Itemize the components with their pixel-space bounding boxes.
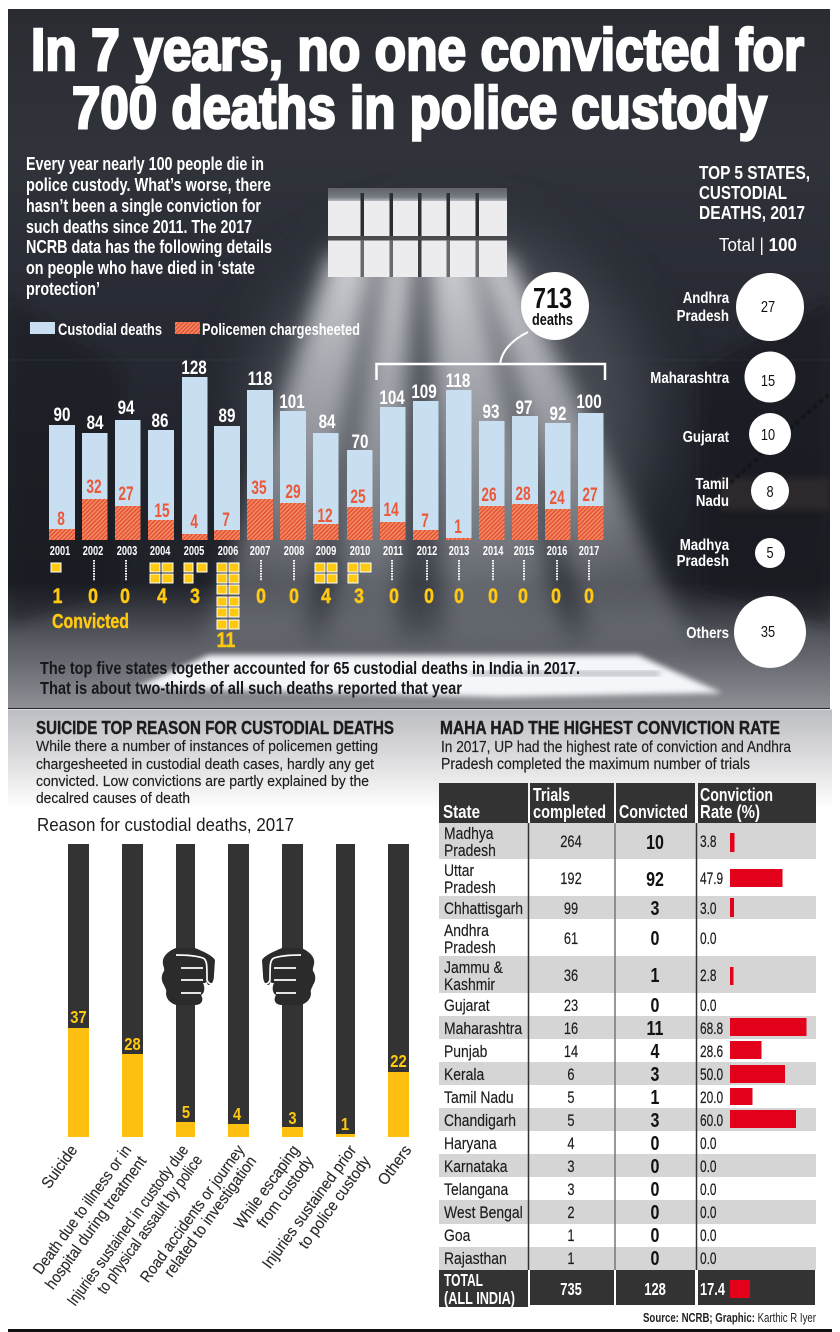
conviction rates: 0.0 bbox=[700, 1204, 717, 1223]
convicted counts: 0 bbox=[651, 1132, 659, 1154]
conviction rates: 0.0 bbox=[700, 930, 717, 949]
year labels bbox=[50, 545, 599, 558]
pictogram: convictions per year: 4 bbox=[157, 584, 167, 608]
bar chart: reasons as prison bars: 5 bbox=[182, 1103, 190, 1122]
total row: (ALL INDIA) bbox=[444, 1288, 515, 1308]
year labels: 2007 bbox=[250, 545, 270, 558]
chargesheeted values: 28 bbox=[515, 483, 531, 505]
total row bbox=[439, 1270, 815, 1308]
chargesheeted values: 7 bbox=[222, 509, 230, 531]
trials completed: 1 bbox=[567, 1228, 575, 1245]
state names bbox=[444, 825, 523, 1268]
table header: State bbox=[443, 802, 480, 822]
state names: Tamil Nadu bbox=[444, 1089, 514, 1107]
convicted counts: 0 bbox=[651, 1155, 659, 1177]
state names: Kashmir bbox=[444, 976, 495, 994]
chargesheeted values: 27 bbox=[582, 484, 598, 506]
legend bbox=[30, 320, 360, 339]
chargesheeted values: 25 bbox=[350, 486, 366, 508]
trials completed: 61 bbox=[564, 931, 578, 948]
icon: right hand gripping bar bbox=[262, 948, 315, 1005]
state names: Madhya bbox=[444, 825, 494, 843]
conviction rates: 0.0 bbox=[700, 1227, 717, 1246]
chargesheeted values: 8 bbox=[57, 508, 65, 530]
pictogram: convictions per year: 0 bbox=[518, 584, 528, 608]
bubble chart: top 5 states: Others bbox=[686, 625, 729, 642]
text block: suicide explanation bbox=[36, 738, 378, 807]
trials completed: 5 bbox=[567, 1113, 575, 1130]
conviction rates: 0.0 bbox=[700, 1158, 717, 1177]
heading: reason chart: Reason for custodial deaths, 2017 bbox=[37, 814, 294, 835]
chargesheeted values: 32 bbox=[86, 476, 102, 498]
conviction rates: 47.9 bbox=[700, 870, 723, 889]
chargesheeted values: 29 bbox=[285, 481, 301, 503]
table header bbox=[439, 783, 816, 823]
chargesheeted values: 14 bbox=[384, 499, 399, 521]
state names: Chhattisgarh bbox=[444, 900, 523, 918]
convicted counts: 3 bbox=[651, 1109, 659, 1131]
rate bars bbox=[730, 833, 806, 1128]
text block: intro: on people who have died in ‘state bbox=[26, 258, 255, 278]
table header: Trials bbox=[533, 785, 570, 805]
text block: intro: police custody. What’s worse, there bbox=[26, 175, 271, 195]
pictogram: convictions per year: Convicted bbox=[52, 611, 129, 633]
bar chart: reasons as prison bars: 3 bbox=[288, 1109, 297, 1128]
state names: Pradesh bbox=[444, 879, 496, 897]
conviction rates: 28.6 bbox=[700, 1043, 723, 1062]
conviction rates: 20.0 bbox=[700, 1089, 723, 1108]
total death values: 84 bbox=[87, 411, 104, 433]
text block: intro: Every year nearly 100 people die in bbox=[26, 154, 264, 174]
callout: 713 deaths bracket bbox=[376, 272, 605, 380]
chargesheeted values: 12 bbox=[317, 505, 333, 527]
total death values: 128 bbox=[181, 356, 207, 378]
heading: suicide top reason: SUICIDE TOP REASON FOR CUSTODIAL DEATHS bbox=[36, 718, 394, 738]
pictogram: convictions per year: 0 bbox=[389, 584, 399, 608]
legend: Policemen chargesheeted bbox=[202, 320, 360, 339]
rotated reason labels: from custody bbox=[254, 1153, 317, 1231]
bar chart: reasons as prison bars: 4 bbox=[233, 1105, 242, 1124]
chargesheeted values: 27 bbox=[118, 483, 134, 505]
convicted counts: 4 bbox=[651, 1040, 659, 1062]
rotated reason labels bbox=[30, 1142, 415, 1309]
chargesheeted values: 4 bbox=[190, 511, 199, 533]
text block: conviction summary: Pradesh completed the maximum number of trials bbox=[441, 756, 750, 773]
bubble chart: top 5 states: 10 bbox=[761, 427, 775, 444]
convicted counts: 0 bbox=[651, 1178, 659, 1200]
total row: 735 bbox=[560, 1280, 582, 1300]
total death values: 118 bbox=[248, 367, 273, 389]
bubble chart: top 5 states: Maharashtra bbox=[650, 370, 730, 387]
text block: conviction summary bbox=[441, 739, 791, 773]
total death values: 89 bbox=[219, 404, 235, 426]
table header: Convicted bbox=[619, 802, 688, 822]
conviction rates bbox=[700, 833, 723, 1269]
rotated reason labels: to police custody bbox=[296, 1153, 374, 1252]
bar chart: reasons as prison bars: 37 bbox=[70, 1008, 87, 1027]
conviction rates: 0.0 bbox=[700, 1250, 717, 1269]
total death values: 93 bbox=[483, 400, 499, 422]
text block: intro: NCRB data has the following details bbox=[26, 237, 272, 257]
bubble chart: top 5 states: Tamil bbox=[695, 476, 729, 493]
bar chart: reasons as prison bars: 22 bbox=[390, 1052, 407, 1071]
rotated reason labels: Injuries sustained prior bbox=[259, 1142, 361, 1272]
state names: Karnataka bbox=[444, 1158, 508, 1176]
table header: Conviction bbox=[700, 785, 773, 805]
bubble chart: top 5 states: Andhra bbox=[683, 290, 730, 307]
total death values: 100 bbox=[576, 390, 602, 412]
rotated reason labels: Road accidents or journey bbox=[137, 1142, 248, 1286]
pictogram: convictions per year: 0 bbox=[88, 584, 98, 608]
conviction rates: 3.0 bbox=[700, 900, 717, 919]
table header: completed bbox=[533, 802, 606, 822]
icon: left hand gripping bar bbox=[162, 948, 215, 1005]
year labels: 2009 bbox=[316, 545, 336, 558]
trials completed bbox=[560, 834, 582, 1268]
total death values: 70 bbox=[352, 430, 368, 452]
year labels: 2012 bbox=[417, 545, 437, 558]
state names: Pradesh bbox=[444, 939, 496, 957]
chargesheeted values: 15 bbox=[154, 500, 170, 522]
rotated reason labels: Suicide bbox=[39, 1142, 81, 1192]
total row: TOTAL bbox=[444, 1270, 483, 1290]
trials completed: 3 bbox=[567, 1159, 575, 1176]
convicted counts: 3 bbox=[651, 897, 659, 919]
trials completed: 5 bbox=[567, 1090, 575, 1107]
state names: Rajasthan bbox=[444, 1250, 507, 1268]
trials completed: 14 bbox=[564, 1044, 578, 1061]
pictogram: convictions per year: 4 bbox=[321, 584, 331, 608]
trials completed: 192 bbox=[560, 871, 582, 888]
bubble chart: top 5 states: Pradesh bbox=[677, 308, 729, 325]
bar chart: reasons as prison bars: 28 bbox=[124, 1035, 141, 1054]
table: conviction rate by state bbox=[439, 783, 816, 1308]
heading: maha highest conviction rate: MAHA HAD THE HIGHEST CONVICTION RATE bbox=[440, 717, 780, 738]
convicted counts: 92 bbox=[646, 868, 664, 890]
state names: West Bengal bbox=[444, 1204, 523, 1222]
trials completed: 6 bbox=[567, 1067, 575, 1084]
total row: 128 bbox=[644, 1280, 666, 1300]
year labels: 2016 bbox=[547, 545, 567, 558]
total death values: 97 bbox=[516, 396, 532, 418]
source credit: Source: NCRB; Graphic: Karthic R Iyer bbox=[643, 1311, 816, 1325]
text block: suicide explanation: While there a number of instances of policemen getting bbox=[36, 738, 378, 755]
year labels: 2003 bbox=[117, 545, 137, 558]
chargesheeted values: 24 bbox=[550, 487, 565, 509]
heading: top 5 states: CUSTODIAL bbox=[699, 182, 787, 203]
year labels: 2008 bbox=[284, 545, 304, 558]
bar chart: reasons as prison bars: 1 bbox=[341, 1115, 349, 1134]
conviction rates: 3.8 bbox=[700, 833, 717, 852]
bubble chart: top 5 states: 8 bbox=[766, 484, 774, 501]
pictogram: convictions per year: 0 bbox=[424, 584, 434, 608]
year labels: 2013 bbox=[449, 545, 469, 558]
trials completed: 36 bbox=[564, 968, 578, 985]
pictogram: convictions per year: 1 bbox=[53, 584, 62, 608]
state names: Jammu & bbox=[444, 959, 503, 977]
icon: barred prison window bbox=[328, 188, 507, 277]
trials completed: 16 bbox=[564, 1021, 578, 1038]
total death values: 101 bbox=[279, 390, 305, 412]
heading: top 5 states: Total | 100 bbox=[719, 235, 797, 255]
trials completed: 99 bbox=[564, 901, 578, 918]
pictogram: convictions per year: 3 bbox=[190, 584, 200, 608]
panel: lower section backdrop bbox=[8, 710, 832, 810]
state names: Punjab bbox=[444, 1043, 487, 1061]
text block: intro: protection’ bbox=[26, 279, 100, 299]
bubble chart: top 5 states: Nadu bbox=[696, 493, 729, 510]
convicted counts: 0 bbox=[651, 994, 659, 1016]
pictogram: convictions per year: 0 bbox=[289, 584, 299, 608]
total death values: 104 bbox=[379, 386, 405, 408]
convicted counts: 0 bbox=[651, 1224, 659, 1246]
convicted counts: 0 bbox=[651, 1201, 659, 1223]
text block: suicide explanation: decalred causes of death bbox=[36, 790, 190, 807]
pictogram: convictions per year: 0 bbox=[454, 584, 464, 608]
pictogram: convictions per year bbox=[51, 560, 594, 652]
total death values bbox=[54, 356, 602, 452]
striped rows bbox=[439, 823, 816, 1270]
convicted counts: 3 bbox=[651, 1063, 659, 1085]
year labels: 2011 bbox=[383, 545, 403, 558]
trials completed: 1 bbox=[567, 1251, 575, 1268]
state names: Andhra bbox=[444, 922, 489, 940]
title bbox=[31, 17, 804, 141]
trials completed: 3 bbox=[567, 1182, 575, 1199]
total death values: 109 bbox=[411, 380, 437, 402]
state names: Kerala bbox=[444, 1066, 485, 1084]
total death values: 86 bbox=[152, 409, 168, 431]
convicted counts: 0 bbox=[651, 1247, 659, 1269]
state names: Maharashtra bbox=[444, 1020, 523, 1038]
text block: top five note bbox=[40, 658, 580, 698]
state names: Goa bbox=[444, 1227, 471, 1245]
text block: top five note: The top five states together accounted for 65 custodial deaths in India in 2017. bbox=[40, 658, 580, 678]
convicted counts: 0 bbox=[651, 927, 659, 949]
conviction rates: 0.0 bbox=[700, 997, 717, 1016]
bar chart: reasons as prison bars bbox=[68, 844, 409, 1137]
bubble chart: top 5 states bbox=[650, 273, 806, 668]
year labels: 2015 bbox=[514, 545, 534, 558]
pictogram: convictions per year: 0 bbox=[256, 584, 266, 608]
bubble chart: top 5 states: 5 bbox=[766, 545, 774, 562]
bubble chart: top 5 states: 35 bbox=[761, 624, 775, 641]
text block: suicide explanation: chargesheeted in custodial death cases, hardly any get bbox=[36, 756, 375, 773]
bar chart: custodial deaths and chargesheeted bbox=[49, 356, 604, 558]
year labels: 2006 bbox=[218, 545, 238, 558]
total death values: 92 bbox=[550, 402, 566, 424]
total death values: 84 bbox=[319, 410, 336, 432]
conviction rates: 50.0 bbox=[700, 1066, 723, 1085]
panel: custody background scene bbox=[8, 9, 830, 710]
total death values: 90 bbox=[54, 403, 70, 425]
convicted counts: 11 bbox=[647, 1017, 663, 1039]
state names: Haryana bbox=[444, 1135, 497, 1153]
pictogram: convictions per year: 0 bbox=[584, 584, 594, 608]
text block: intro: hasn’t been a single conviction for bbox=[26, 196, 261, 216]
text block: intro: such deaths since 2011. The 2017 bbox=[26, 217, 252, 237]
total death values: 94 bbox=[118, 396, 135, 418]
conviction rates: 68.8 bbox=[700, 1020, 723, 1039]
trials completed: 4 bbox=[567, 1136, 575, 1153]
convicted counts: 1 bbox=[651, 964, 659, 986]
chargesheeted values: 7 bbox=[421, 510, 429, 532]
year labels: 2004 bbox=[150, 545, 171, 558]
heading: top 5 states bbox=[699, 162, 810, 255]
trials completed: 264 bbox=[560, 834, 582, 851]
bubble chart: top 5 states: 15 bbox=[761, 373, 775, 390]
rotated reason labels: to physical assault by police bbox=[94, 1152, 206, 1297]
bubble chart: top 5 states: Gujarat bbox=[683, 429, 729, 446]
state names: Gujarat bbox=[444, 997, 490, 1015]
conviction rates: 2.8 bbox=[700, 967, 717, 986]
rotated reason labels: While escaping bbox=[231, 1142, 303, 1232]
total death values: 118 bbox=[446, 369, 471, 391]
year labels: 2014 bbox=[483, 545, 504, 558]
callout: 713 deaths bracket: deaths bbox=[532, 310, 573, 329]
year labels: 2002 bbox=[83, 545, 103, 558]
chargesheeted values: 26 bbox=[481, 484, 497, 506]
pictogram: convictions per year: 0 bbox=[551, 584, 561, 608]
conviction rates: 0.0 bbox=[700, 1181, 717, 1200]
legend: Custodial deaths bbox=[58, 320, 162, 339]
pictogram: convictions per year: 11 bbox=[217, 628, 235, 652]
pictogram: convictions per year: 3 bbox=[354, 584, 364, 608]
rotated reason labels: Death due to illness or in bbox=[30, 1142, 135, 1278]
state names: Telangana bbox=[444, 1181, 509, 1199]
convicted counts: 1 bbox=[651, 1086, 659, 1108]
chargesheeted values bbox=[57, 476, 598, 538]
trials completed: 23 bbox=[564, 998, 578, 1015]
year labels: 2010 bbox=[350, 545, 370, 558]
year labels: 2005 bbox=[184, 545, 204, 558]
trials completed: 2 bbox=[567, 1205, 575, 1222]
rotated reason labels: related to investigation bbox=[161, 1153, 260, 1281]
conviction rates: 60.0 bbox=[700, 1112, 723, 1131]
heading: top 5 states: DEATHS, 2017 bbox=[699, 202, 805, 223]
table header: Rate (%) bbox=[700, 802, 760, 822]
chargesheeted values: 1 bbox=[454, 516, 462, 538]
convicted counts bbox=[646, 831, 664, 1269]
text block: conviction summary: In 2017, UP had the highest rate of conviction and Andhra bbox=[441, 739, 791, 756]
chargesheeted values: 35 bbox=[251, 477, 267, 499]
heading: top 5 states: TOP 5 STATES, bbox=[699, 162, 810, 183]
conviction rates: 0.0 bbox=[700, 1135, 717, 1154]
state names: Uttar bbox=[444, 862, 474, 880]
rotated reason labels: Injuries sustained in custody due bbox=[64, 1142, 192, 1309]
rotated reason labels: hospital during treatment bbox=[42, 1153, 151, 1293]
rotated reason labels: Others bbox=[375, 1142, 415, 1189]
bubble chart: top 5 states: Madhya bbox=[680, 537, 730, 554]
state names: Pradesh bbox=[444, 842, 496, 860]
bubble chart: top 5 states: 27 bbox=[761, 299, 775, 316]
pictogram: convictions per year: 0 bbox=[488, 584, 498, 608]
callout: 713 deaths bracket: 713 bbox=[533, 283, 572, 315]
text block: intro bbox=[26, 154, 272, 299]
total row: 17.4 bbox=[700, 1279, 725, 1299]
state names: Chandigarh bbox=[444, 1112, 516, 1130]
bubble chart: top 5 states: Pradesh bbox=[677, 553, 729, 570]
year labels: 2017 bbox=[579, 545, 599, 558]
text block: suicide explanation: convicted. Low convictions are partly explained by the bbox=[36, 773, 369, 790]
pictogram: convictions per year: 0 bbox=[120, 584, 130, 608]
year labels: 2001 bbox=[50, 545, 70, 558]
text block: top five note: That is about two-thirds of all such deaths reported that year bbox=[40, 678, 462, 698]
convicted counts: 10 bbox=[646, 831, 664, 853]
